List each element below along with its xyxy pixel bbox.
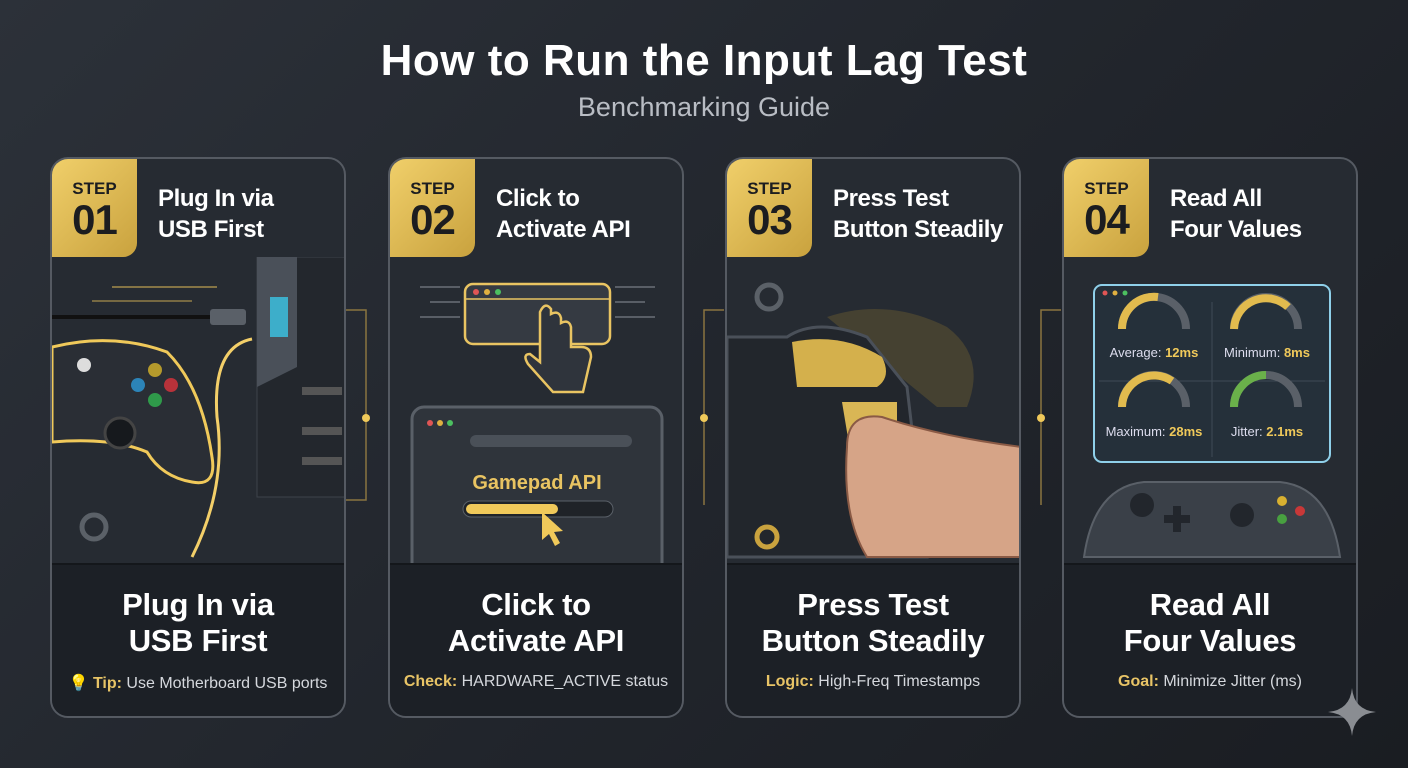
panel: step 4 bbox=[1062, 157, 1358, 718]
step badge 03 bbox=[727, 159, 812, 257]
header title 1 bbox=[158, 185, 274, 243]
bottom section 2 bbox=[390, 563, 686, 720]
header title 4: Read All bbox=[1170, 185, 1262, 212]
header title 3 bbox=[833, 185, 1004, 243]
header title 2 bbox=[496, 185, 630, 243]
step badge 04: 04 bbox=[1084, 196, 1129, 243]
header title 3: Button Steadily bbox=[833, 216, 1003, 243]
header title 4 bbox=[1170, 185, 1302, 243]
bottom section 3: Button Steadily bbox=[762, 623, 984, 658]
illustration: gauges dashboard and controller: Average: 12ms bbox=[1110, 345, 1198, 360]
header title 1: Plug In via bbox=[158, 185, 274, 212]
header title 1: USB First bbox=[158, 216, 264, 243]
connector 3-4 bbox=[1037, 309, 1061, 505]
illustration: browser click: Gamepad API bbox=[472, 472, 602, 494]
step badge 02: STEP bbox=[410, 179, 455, 198]
step badge 03: STEP bbox=[747, 179, 792, 198]
step badge 02: 02 bbox=[410, 196, 455, 243]
connector 1-2 bbox=[346, 309, 370, 501]
header title 3: Press Test bbox=[833, 185, 949, 212]
panel: step 1 bbox=[50, 157, 346, 718]
bottom section 1: USB First bbox=[129, 623, 267, 658]
logic note: Logic: High-Freq Timestamps bbox=[766, 673, 980, 690]
illustration: gauges dashboard and controller bbox=[1082, 284, 1342, 558]
title: How to Run the Input Lag Test bbox=[381, 36, 1027, 85]
illustration: gauges dashboard and controller: Maximum: 28ms bbox=[1106, 424, 1202, 439]
bottom section 3: Press Test bbox=[797, 587, 949, 622]
bottom section 4: Four Values bbox=[1124, 623, 1296, 658]
panel: step 3 bbox=[725, 157, 1021, 718]
bottom section 3 bbox=[727, 563, 1023, 720]
bottom section 1: Plug In via bbox=[122, 587, 274, 622]
illustration: controller and motherboard bbox=[52, 257, 344, 558]
bottom section 2: Click to bbox=[481, 587, 591, 622]
step badge 03: 03 bbox=[747, 196, 792, 243]
goal note: Goal: Minimize Jitter (ms) bbox=[1118, 673, 1302, 690]
illustration: finger pressing trigger bbox=[727, 282, 1019, 558]
panel: step 2 bbox=[388, 157, 684, 718]
icon: sparkle bbox=[1328, 688, 1376, 736]
header title 4: Four Values bbox=[1170, 216, 1302, 243]
check note: Check: HARDWARE_ACTIVE status bbox=[404, 673, 668, 690]
header title 2: Click to bbox=[496, 185, 579, 212]
bottom section 4 bbox=[1064, 563, 1360, 720]
step badge 01: STEP bbox=[72, 179, 117, 198]
header title 2: Activate API bbox=[496, 216, 630, 243]
step badge 01 bbox=[52, 159, 137, 257]
illustration: gauges dashboard and controller: Jitter: 2.1ms bbox=[1231, 424, 1303, 439]
connector 2-3 bbox=[700, 309, 724, 505]
step badge 04 bbox=[1064, 159, 1149, 257]
illustration: browser click bbox=[410, 282, 664, 563]
illustration: gauges dashboard and controller: Minimum: 8ms bbox=[1224, 345, 1310, 360]
bottom section 2: Activate API bbox=[448, 623, 624, 658]
step badge 01: 01 bbox=[72, 196, 117, 243]
subtitle: Benchmarking Guide bbox=[578, 92, 830, 122]
step badge 04: STEP bbox=[1084, 179, 1129, 198]
bottom section 4: Read All bbox=[1150, 587, 1270, 622]
tip: 💡 Tip: Use Motherboard USB ports bbox=[69, 675, 327, 692]
step badge 02 bbox=[390, 159, 475, 257]
bottom section 1 bbox=[52, 563, 348, 720]
